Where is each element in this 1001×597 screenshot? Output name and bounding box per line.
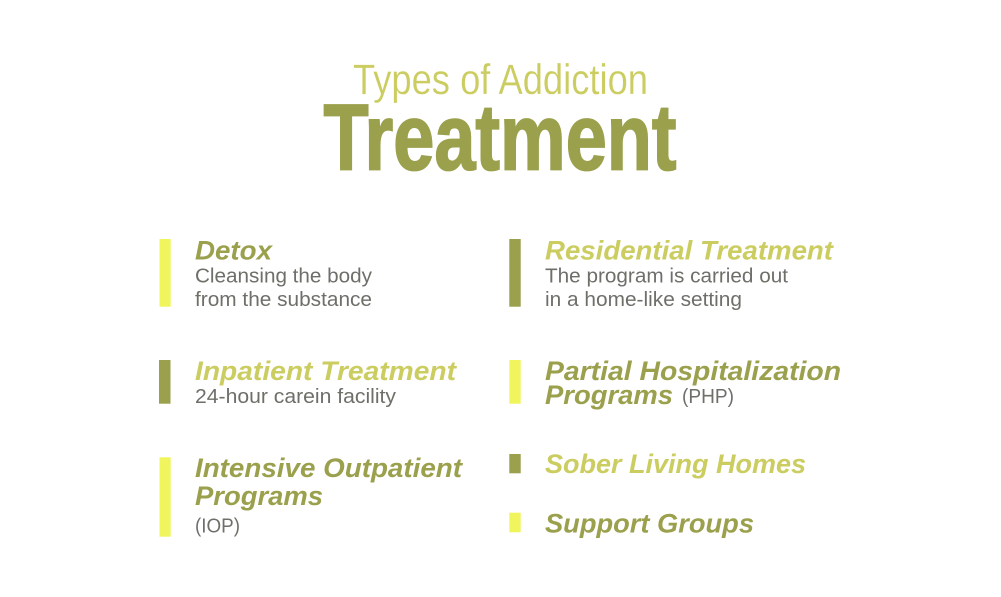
heading: Detox xyxy=(195,236,273,266)
title xyxy=(324,56,676,190)
panel: partial hospitalization programs xyxy=(509,356,841,410)
description: in a home-like setting xyxy=(545,289,742,311)
description: Cleansing the body xyxy=(195,266,372,288)
heading: Inpatient Treatment xyxy=(195,356,457,386)
bar xyxy=(160,457,171,537)
bar xyxy=(160,239,171,307)
panel: residential treatment xyxy=(509,236,834,311)
bar xyxy=(159,360,170,404)
description xyxy=(195,266,372,311)
heading xyxy=(195,453,463,511)
bar xyxy=(509,360,521,404)
title line 1: Types of Addiction xyxy=(353,56,648,104)
acronym: (IOP) xyxy=(195,516,240,538)
description: 24-hour carein facility xyxy=(195,386,396,408)
description: The program is carried out xyxy=(545,266,788,288)
heading: Residential Treatment xyxy=(545,236,834,266)
heading: Support Groups xyxy=(545,508,754,538)
heading: Programs xyxy=(195,481,323,511)
bar xyxy=(509,239,521,307)
heading: Intensive Outpatient xyxy=(195,453,463,483)
heading: Partial Hospitalization xyxy=(545,356,841,386)
heading: Sober Living Homes xyxy=(545,449,806,479)
bar xyxy=(509,454,521,473)
description xyxy=(545,266,788,311)
panel: inpatient treatment xyxy=(159,356,457,408)
panel: intensive outpatient programs xyxy=(160,453,463,538)
heading: Programs xyxy=(545,380,673,410)
title line 2: Treatment xyxy=(324,84,676,190)
heading xyxy=(545,356,841,410)
panel: sober living homes xyxy=(509,449,806,479)
description: from the substance xyxy=(195,289,372,311)
bar xyxy=(509,513,521,532)
panel: detox xyxy=(160,236,372,311)
panel: support groups xyxy=(509,508,754,538)
acronym: (PHP) xyxy=(682,386,734,408)
